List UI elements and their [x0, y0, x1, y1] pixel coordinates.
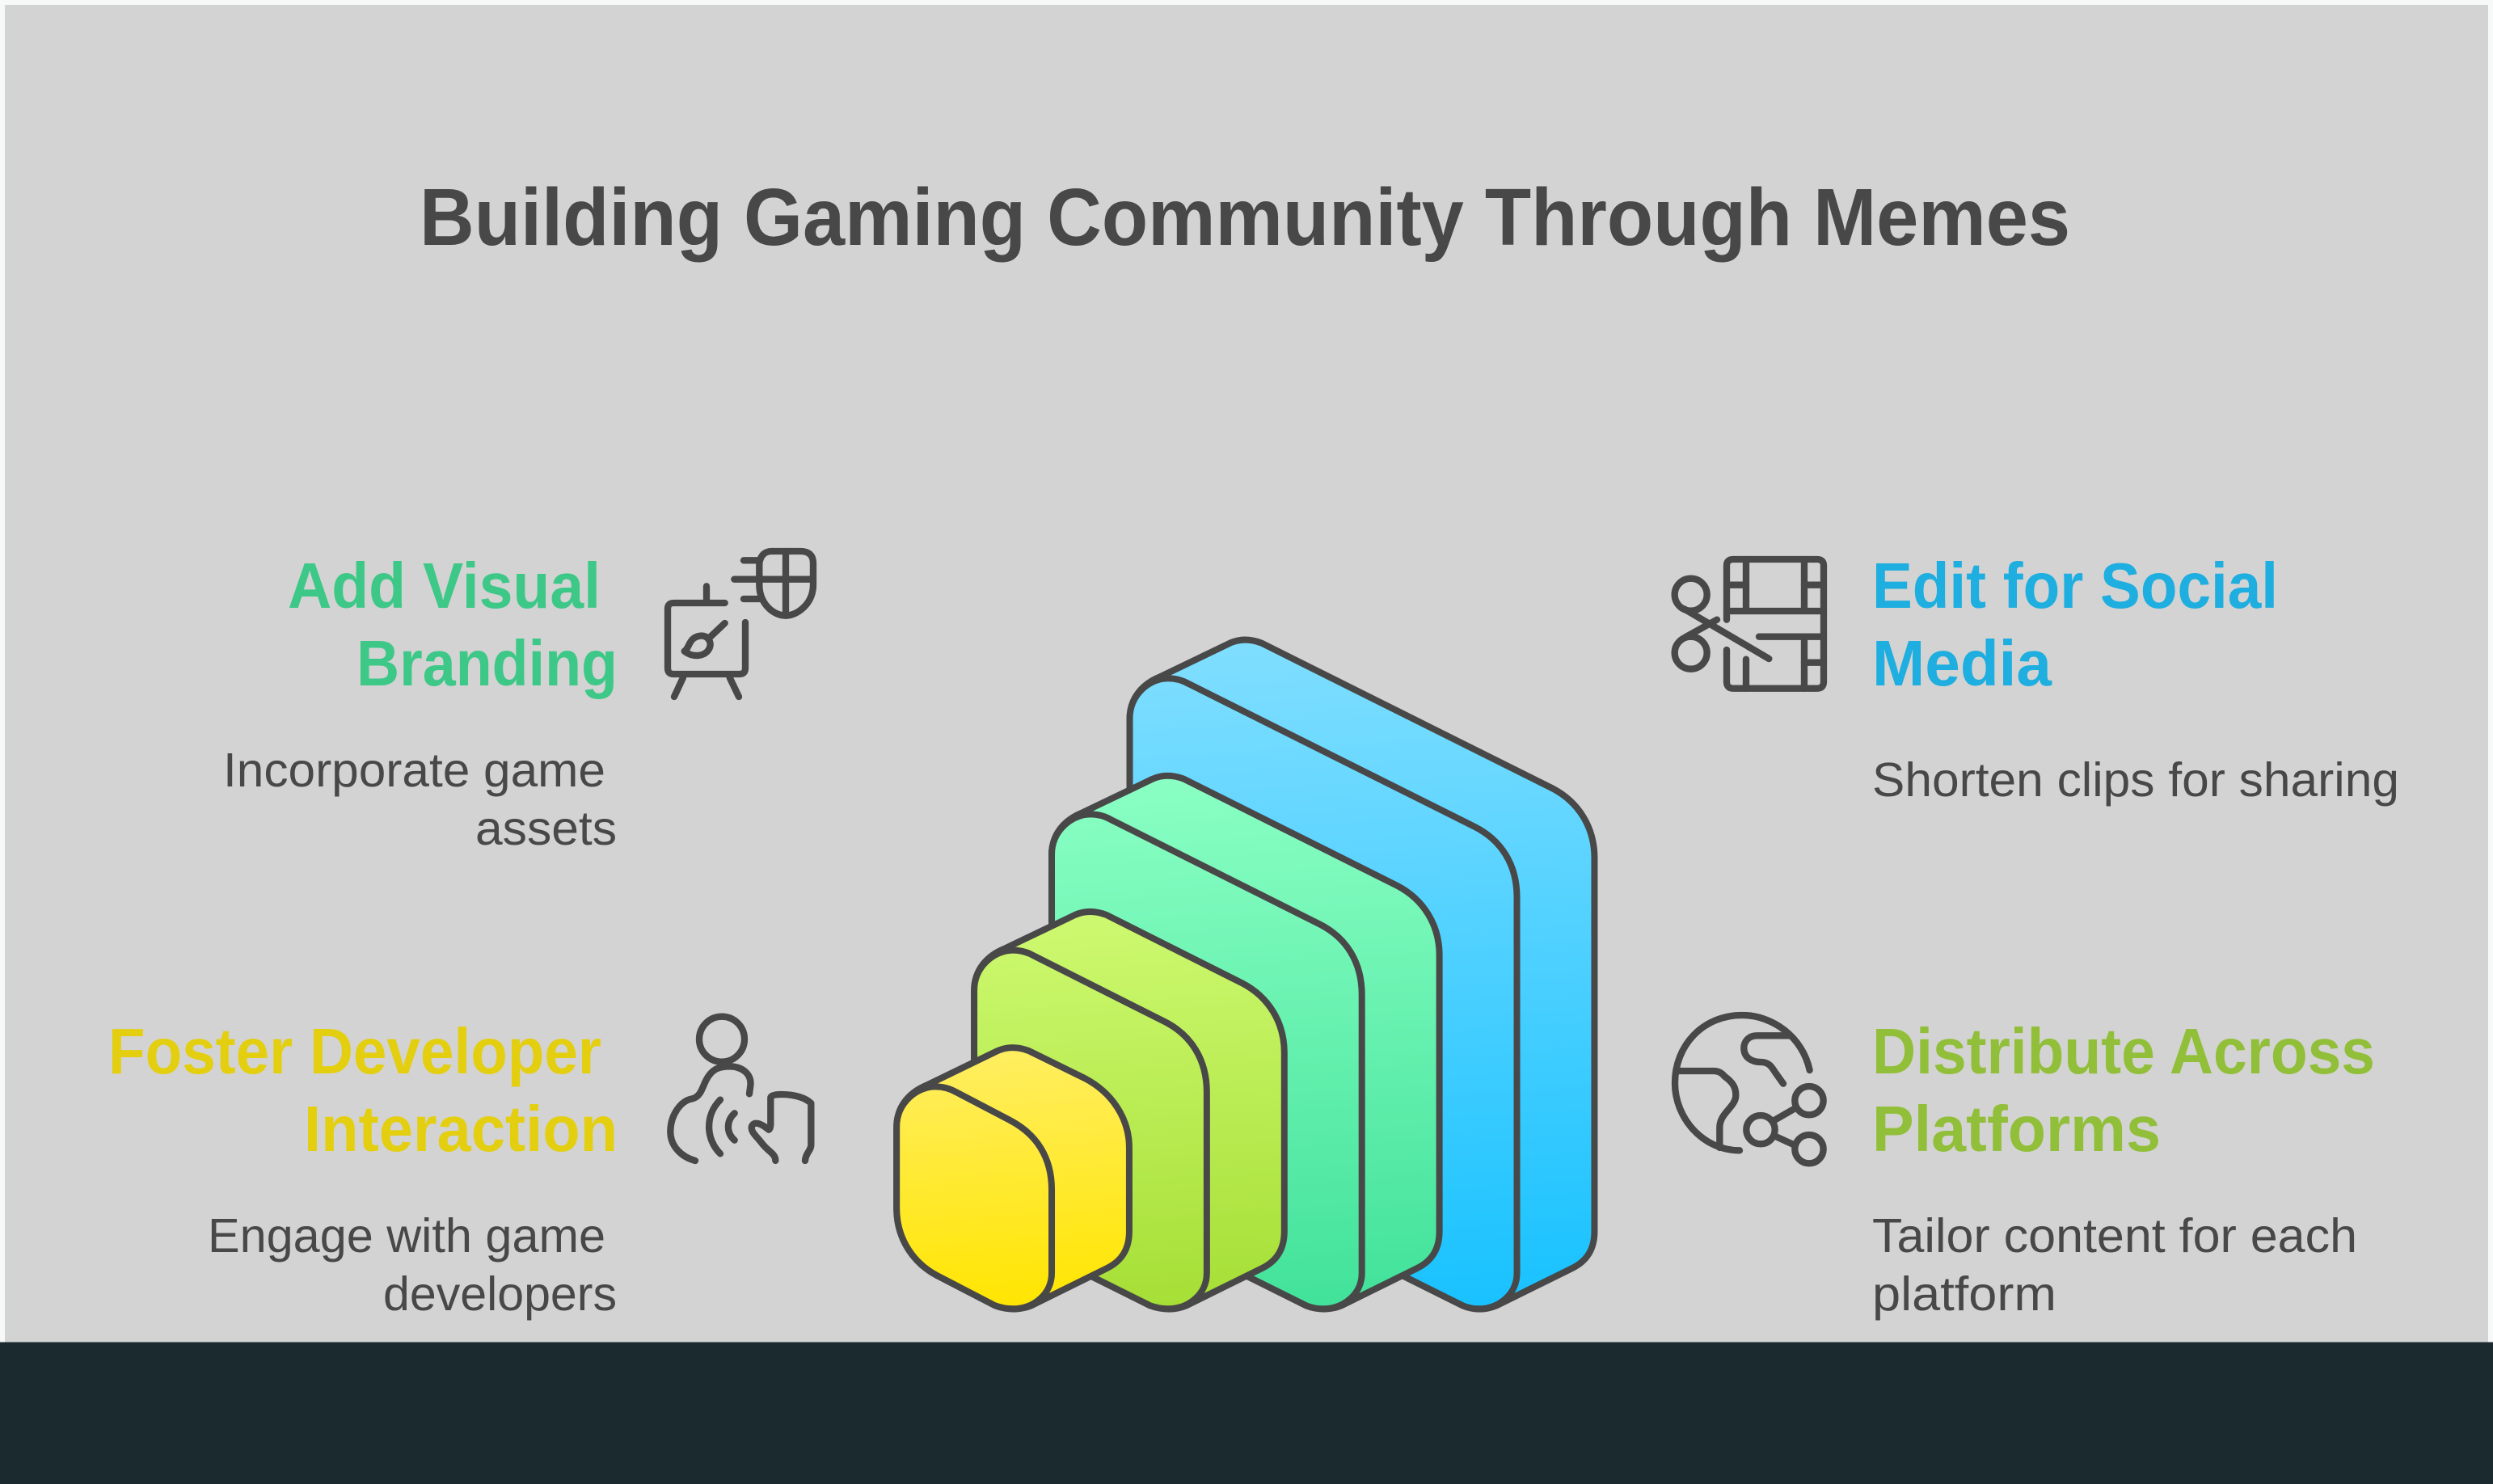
title: Building Gaming Community Through Memes	[420, 172, 2070, 263]
footer band	[0, 1342, 2493, 1484]
description: Engage with game developers: Engage with game	[208, 1209, 605, 1263]
description: Tailor content for each platform	[1872, 1209, 2357, 1321]
heading: Foster Developer Interaction: Interaction	[304, 1093, 618, 1165]
icon: globe with share nodes	[1675, 1015, 1824, 1163]
heading: Edit for Social Media: Edit for Social	[1872, 550, 2278, 622]
panel: Edit for Social Media	[1675, 550, 2399, 807]
block: green	[1052, 776, 1440, 1309]
icon: person with touch gesture	[670, 1017, 811, 1161]
heading: Distribute Across Platforms: Platforms	[1872, 1093, 2161, 1165]
description: Tailor content for each platform: Tailor content for each	[1872, 1209, 2357, 1263]
heading: Add Visual Branding: Add Visual	[288, 550, 601, 622]
heading: Distribute Across Platforms: Distribute Across	[1872, 1015, 2375, 1087]
icon: scissors cutting film strip	[1675, 559, 1824, 689]
panel: Add Visual Branding	[223, 550, 813, 855]
heading: Edit for Social Media	[1872, 550, 2278, 699]
description: Incorporate game assets: assets	[475, 802, 617, 855]
description: Engage with game developers: developers	[383, 1267, 617, 1321]
chart: nested isometric blocks	[896, 640, 1594, 1309]
heading: Foster Developer Interaction	[108, 1015, 618, 1165]
heading: Add Visual Branding	[288, 550, 618, 699]
panel: Foster Developer Interaction	[108, 1015, 811, 1321]
description: Shorten clips for sharing: Shorten clips for sharing	[1872, 753, 2399, 807]
heading: Distribute Across Platforms	[1872, 1015, 2375, 1165]
description: Incorporate game assets	[223, 744, 617, 855]
block: blue	[1130, 640, 1594, 1309]
heading: Foster Developer Interaction: Foster Developer	[108, 1015, 601, 1087]
block: lime	[974, 912, 1284, 1309]
heading: Add Visual Branding: Branding	[356, 627, 618, 699]
panel: Distribute Across Platforms	[1675, 1015, 2375, 1321]
description: Incorporate game assets: Incorporate game	[223, 744, 605, 797]
description: Tailor content for each platform: platform	[1872, 1267, 2056, 1321]
description: Engage with game developers	[208, 1209, 617, 1321]
icon: easel with brush and shield	[668, 551, 813, 697]
heading: Edit for Social Media: Media	[1872, 627, 2052, 699]
block: yellow	[896, 1048, 1129, 1309]
